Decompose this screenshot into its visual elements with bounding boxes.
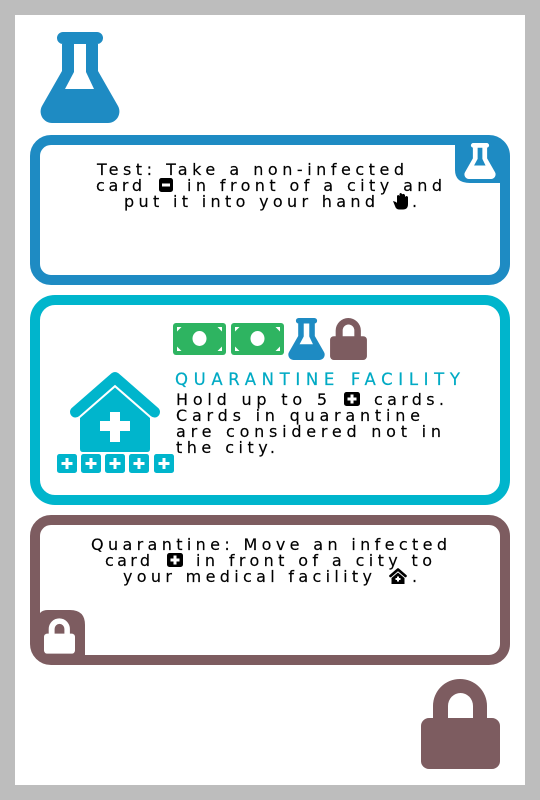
text: quarantine description: Quarantine: Move an infected [91,535,447,554]
text: test description: . [412,192,417,211]
icon: lock corner tab [38,610,85,658]
text: facility description: the city. [176,438,275,457]
icon: large quarantine lock [421,679,500,769]
text: test description: in front of a city and [187,176,442,195]
text: facility description: are considered not in [176,422,441,441]
icon: non-infected card [159,178,173,192]
text: facility description: Hold up to 5 [176,390,327,409]
text: quarantine description: your medical facility [123,567,372,586]
panel: quarantine facility [35,300,505,500]
text: quarantine description: card [105,551,150,570]
icon: small medical facility [390,570,406,584]
text: test description: Test: Take a non-infected [96,160,404,179]
cost icons [173,318,367,360]
text: quarantine description [91,535,447,586]
icon row: five infected cards [57,454,174,473]
icon: large test flask [41,32,119,123]
text: test description [96,160,442,211]
text: facility description: Cards in quarantine [176,406,420,425]
icon: medical facility [76,378,154,452]
text: quarantine description: . [412,567,417,586]
icon: money two [231,323,284,355]
text: test description: card [96,176,142,195]
icon: small flask [288,318,325,360]
icon: money one [173,323,226,355]
heading: quarantine facility: QUARANTINE FACILITY [175,370,461,389]
text: facility description [176,390,444,457]
panel: quarantine action [35,520,505,660]
icon: hand [393,193,408,210]
panel: test action [35,138,507,280]
icon: infected card [167,553,183,567]
text: quarantine description: in front of a city to [196,551,432,570]
icon: small lock [330,318,367,360]
icon: flask corner tab [455,138,507,183]
icon: infected card [344,392,360,406]
text: test description: put it into your hand [124,192,375,211]
text: facility description: cards. [374,390,444,409]
